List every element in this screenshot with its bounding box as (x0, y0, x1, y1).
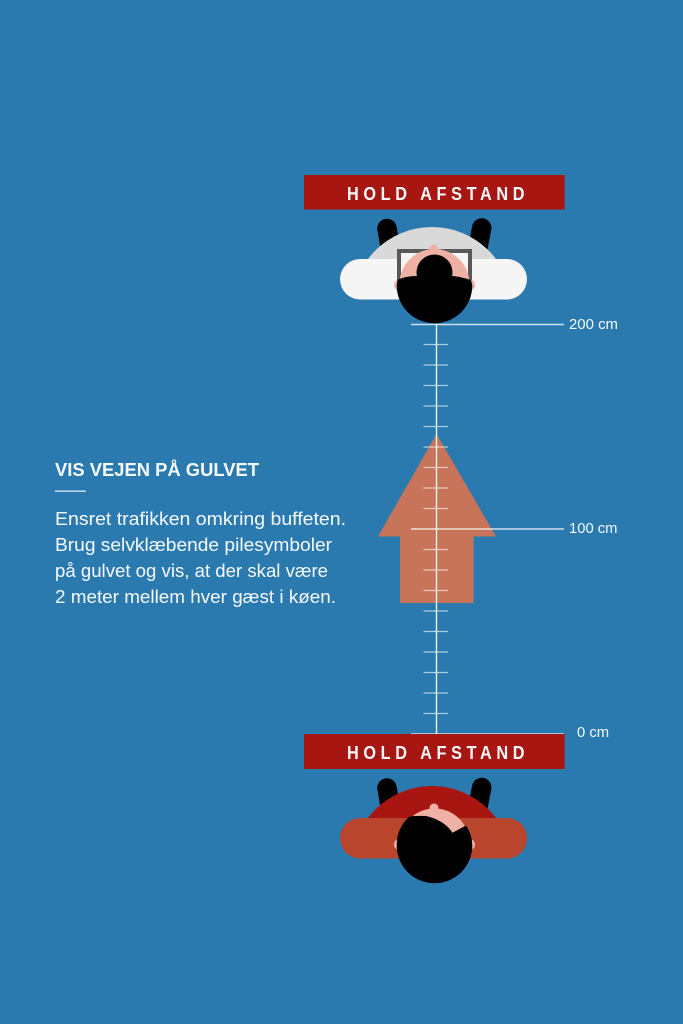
bottom person, seen from above (340, 778, 527, 884)
laptop frame (399, 251, 470, 285)
label: 0 cm: 0 cm (577, 725, 609, 741)
top banner (304, 175, 565, 210)
label: 100 cm: 100 cm (569, 521, 618, 537)
banner text: HOLD AFSTAND (347, 183, 524, 204)
face (400, 249, 470, 319)
heading: VIS VEJEN PÅ GULVET (55, 459, 260, 480)
body text: på gulvet og vis, at der skal være (55, 560, 328, 581)
body text: Ensret trafikken omkring buffeten. (55, 508, 346, 529)
ears (394, 280, 402, 290)
top person, seen from above (340, 218, 527, 324)
hair (397, 816, 472, 883)
label: 200 cm: 200 cm (569, 317, 618, 333)
arms (340, 818, 527, 858)
hands (387, 788, 482, 812)
hands (387, 228, 482, 252)
torso (368, 786, 496, 818)
text block (55, 459, 346, 607)
body text (55, 508, 346, 607)
body text: 2 meter mellem hver gæst i køen. (55, 586, 336, 607)
banner text: HOLD AFSTAND (347, 742, 524, 763)
ears (394, 840, 402, 850)
face (400, 808, 470, 878)
body text: Brug selvklæbende pilesymboler (55, 534, 332, 555)
nose (430, 244, 438, 254)
torso (368, 227, 496, 259)
bottom banner (304, 734, 565, 769)
heading rule (55, 490, 86, 492)
distance scale (411, 317, 618, 741)
floor arrow (378, 434, 496, 603)
hair (397, 254, 472, 323)
nose (430, 804, 438, 812)
arms (340, 259, 527, 300)
